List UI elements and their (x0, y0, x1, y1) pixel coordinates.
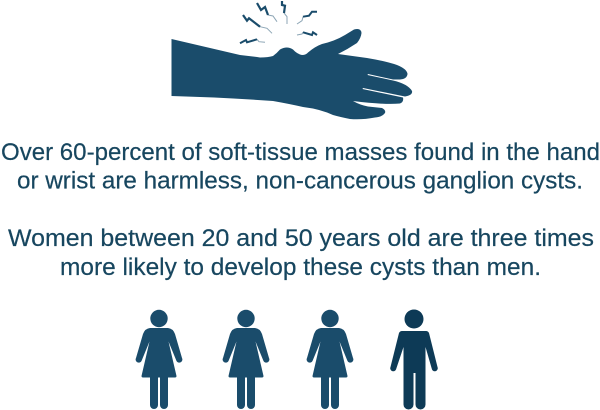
spark: right (297, 32, 317, 35)
text block: women versus men statistic: more likely to develop these cysts than men. (60, 254, 541, 281)
icon: pain sparks (240, 1, 317, 43)
icon: man (390, 310, 438, 410)
text block: soft-tissue statistic: Over 60-percent of soft-tissue masses found in the hand (1, 139, 600, 166)
icon: arm and hand with cyst on wrist (172, 1, 412, 119)
icon: woman 1 (136, 310, 182, 409)
spark: top (282, 1, 287, 24)
text block: women versus men statistic (8, 225, 594, 281)
spark: top left (257, 3, 277, 22)
text block: women versus men statistic: Women between 20 and 50 years old are three times (8, 225, 594, 252)
icon: woman 3 (307, 310, 353, 409)
spark: upper right (297, 12, 317, 24)
text block: soft-tissue statistic: or wrist are harmless, non-cancerous ganglion cysts. (17, 168, 583, 194)
icon: woman 2 (223, 310, 269, 409)
spark: left (240, 39, 265, 43)
spark: upper left (243, 15, 272, 33)
text block: soft-tissue statistic (1, 139, 600, 194)
